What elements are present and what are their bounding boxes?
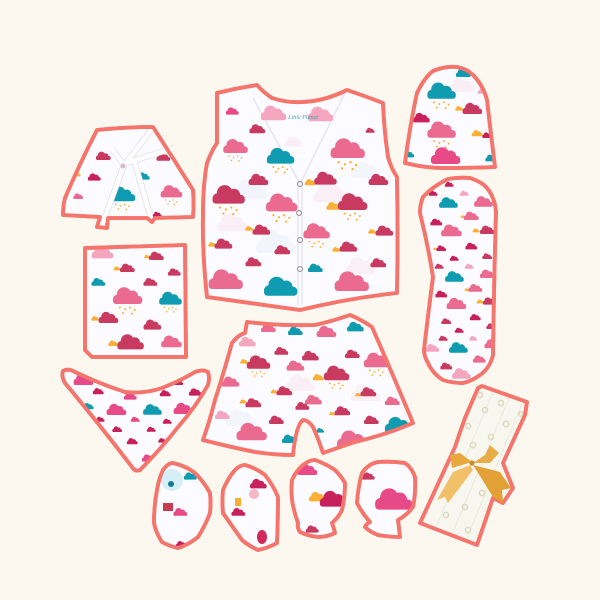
panel: mitten four bbox=[357, 462, 415, 537]
nappy ties bbox=[102, 129, 174, 225]
panel: long burp pad bbox=[420, 178, 500, 383]
panel: tie nappy bbox=[63, 127, 194, 228]
panel: rolled swaddle with ribbon bbox=[420, 386, 527, 545]
vest snap buttons bbox=[297, 182, 302, 271]
panel: baby cap bbox=[402, 67, 497, 168]
panel: shorts bbox=[203, 315, 413, 455]
product photo: baby clothing set bbox=[60, 64, 529, 552]
gold ribbon bow bbox=[437, 445, 511, 503]
panel: triangle bib bbox=[62, 370, 209, 471]
panel: mitten one bbox=[154, 463, 210, 548]
panel: mitten three bbox=[292, 460, 347, 537]
panel: square wash cloth bbox=[85, 245, 186, 357]
panel: sleeveless vest bbox=[203, 85, 398, 310]
panel: mitten two bbox=[222, 465, 278, 550]
vest neck label: Little Planet bbox=[287, 115, 318, 121]
